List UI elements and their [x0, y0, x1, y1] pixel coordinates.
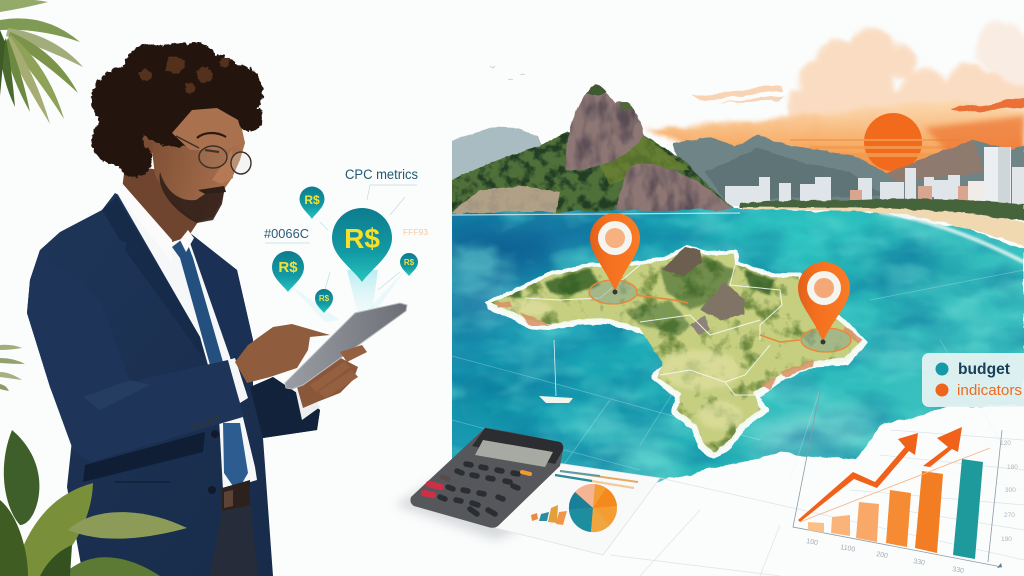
bars — [808, 459, 983, 559]
table shadow under calculator — [395, 470, 520, 540]
island mountain peaks — [662, 247, 745, 335]
neck — [122, 165, 198, 242]
right axis labels: 190 — [1001, 536, 1012, 543]
report mini bars — [531, 505, 567, 525]
chart axes — [793, 390, 1002, 567]
nose — [212, 150, 233, 184]
calculator with report sheet — [410, 428, 660, 555]
person using a tablet — [27, 43, 407, 576]
region borders — [525, 265, 782, 395]
right axis labels: 300 — [1005, 487, 1016, 494]
sun streaks — [790, 139, 960, 157]
icon: right R$ pin: R$ — [404, 258, 415, 267]
tablet — [285, 303, 407, 389]
ear — [135, 135, 153, 161]
plant: leaves bottom left — [0, 430, 187, 576]
jacket right panel shading — [190, 233, 253, 358]
sailboat — [539, 340, 573, 403]
sunset clouds — [644, 22, 1024, 190]
sleeve left — [27, 250, 243, 462]
map pin: large orange — [590, 213, 640, 294]
report sheet — [495, 463, 660, 555]
ocean — [452, 208, 1024, 483]
bottom axis labels: 100 — [806, 538, 818, 547]
icon: small R$ pin: R$ — [319, 294, 330, 303]
hand pointing — [235, 324, 330, 383]
shirt cuff right — [295, 388, 320, 420]
trend line — [800, 448, 990, 522]
right axis labels: 120 — [1000, 440, 1011, 447]
right axis labels: 180 — [1007, 464, 1018, 471]
left lapel — [102, 197, 205, 360]
label: CPC metrics: CPC metrics — [345, 167, 418, 182]
jacket shadow below sleeve — [83, 432, 205, 482]
jacket silhouette — [27, 193, 320, 576]
bar chart with growth arrows — [793, 390, 1018, 575]
bottom axis labels: 330 — [952, 566, 964, 575]
beard — [160, 172, 224, 223]
plant: palm top left — [0, 0, 83, 124]
right axis labels — [1000, 440, 1018, 543]
report header lines — [560, 471, 638, 482]
icon: left R$ pin — [272, 251, 304, 292]
island forest patches — [495, 256, 775, 335]
island foam outline — [487, 247, 865, 457]
forearm right sleeve shading — [250, 377, 320, 438]
mustache and mouth — [198, 186, 226, 194]
orange haze right of sun — [924, 113, 1024, 152]
trousers — [210, 500, 258, 576]
calculator body — [410, 428, 563, 528]
shirt cuff left — [228, 358, 248, 403]
city skyline — [725, 147, 1024, 208]
label: faded code: FFF93 — [403, 228, 429, 237]
route line and coverage circles — [589, 280, 851, 352]
sleeve top fold — [83, 380, 150, 410]
forehead in front of hair — [172, 108, 245, 150]
necktie upper — [172, 237, 223, 365]
icon: left R$ pin: R$ — [278, 259, 298, 276]
waterline — [452, 213, 740, 215]
sugarloaf rock and lower rock — [566, 84, 733, 212]
fingers over tablet — [310, 345, 367, 398]
right axis labels: 270 — [1004, 512, 1015, 519]
eyebrow and eye — [197, 133, 226, 152]
icon: small R$ pin — [315, 289, 333, 313]
map grid lines — [452, 270, 1024, 490]
ocean watercolour blooms — [440, 216, 1010, 473]
lighter lowland patches — [508, 300, 742, 429]
growth arrow two — [923, 427, 962, 467]
lower map paper grid — [610, 430, 1024, 576]
icon: top R$ pin: R$ — [304, 193, 320, 207]
legend item: budget: budget — [958, 361, 1010, 378]
face — [150, 106, 245, 222]
shirt — [117, 188, 257, 490]
bottom axis labels: 1100 — [840, 544, 856, 554]
necktie lower — [223, 423, 248, 492]
calculator keys — [424, 464, 530, 514]
distant left mountain — [452, 126, 542, 180]
hair — [92, 43, 263, 177]
shoreline foam — [880, 212, 1024, 262]
icon: right R$ pin — [400, 253, 418, 276]
distant right mountains — [673, 135, 1024, 205]
icon: large R$ pin: R$ — [344, 223, 380, 254]
icon: large R$ pin — [332, 208, 392, 282]
legend — [922, 353, 1024, 407]
growth arrow one — [798, 433, 918, 522]
icon: top R$ pin — [300, 186, 324, 219]
island rocky coast — [495, 301, 862, 390]
main green hill — [452, 132, 734, 214]
illustration: Rio coastline and sunset — [430, 22, 1024, 576]
sun — [864, 113, 922, 171]
bottom axis labels: 330 — [913, 558, 925, 567]
glasses — [176, 136, 251, 174]
bottom axis labels — [806, 538, 964, 575]
pocket line and button — [115, 430, 219, 494]
belt — [222, 480, 250, 511]
collar — [117, 183, 194, 262]
plant: palm left middle — [0, 345, 25, 391]
legend item: indicators: indicators — [957, 382, 1022, 399]
label: colour code: #0066C — [264, 226, 309, 241]
sleeve buttons — [191, 416, 220, 430]
map of the island — [491, 247, 862, 452]
calculator display — [475, 440, 553, 467]
map pin: right orange — [798, 262, 850, 344]
bottom axis labels: 200 — [876, 551, 888, 560]
sandy beach — [743, 207, 1024, 246]
right hand holding tablet — [297, 355, 358, 408]
rays from tablet to pins — [265, 185, 417, 322]
birds — [490, 66, 525, 80]
tree line along the beach — [740, 199, 1024, 220]
report pie chart — [569, 484, 617, 532]
